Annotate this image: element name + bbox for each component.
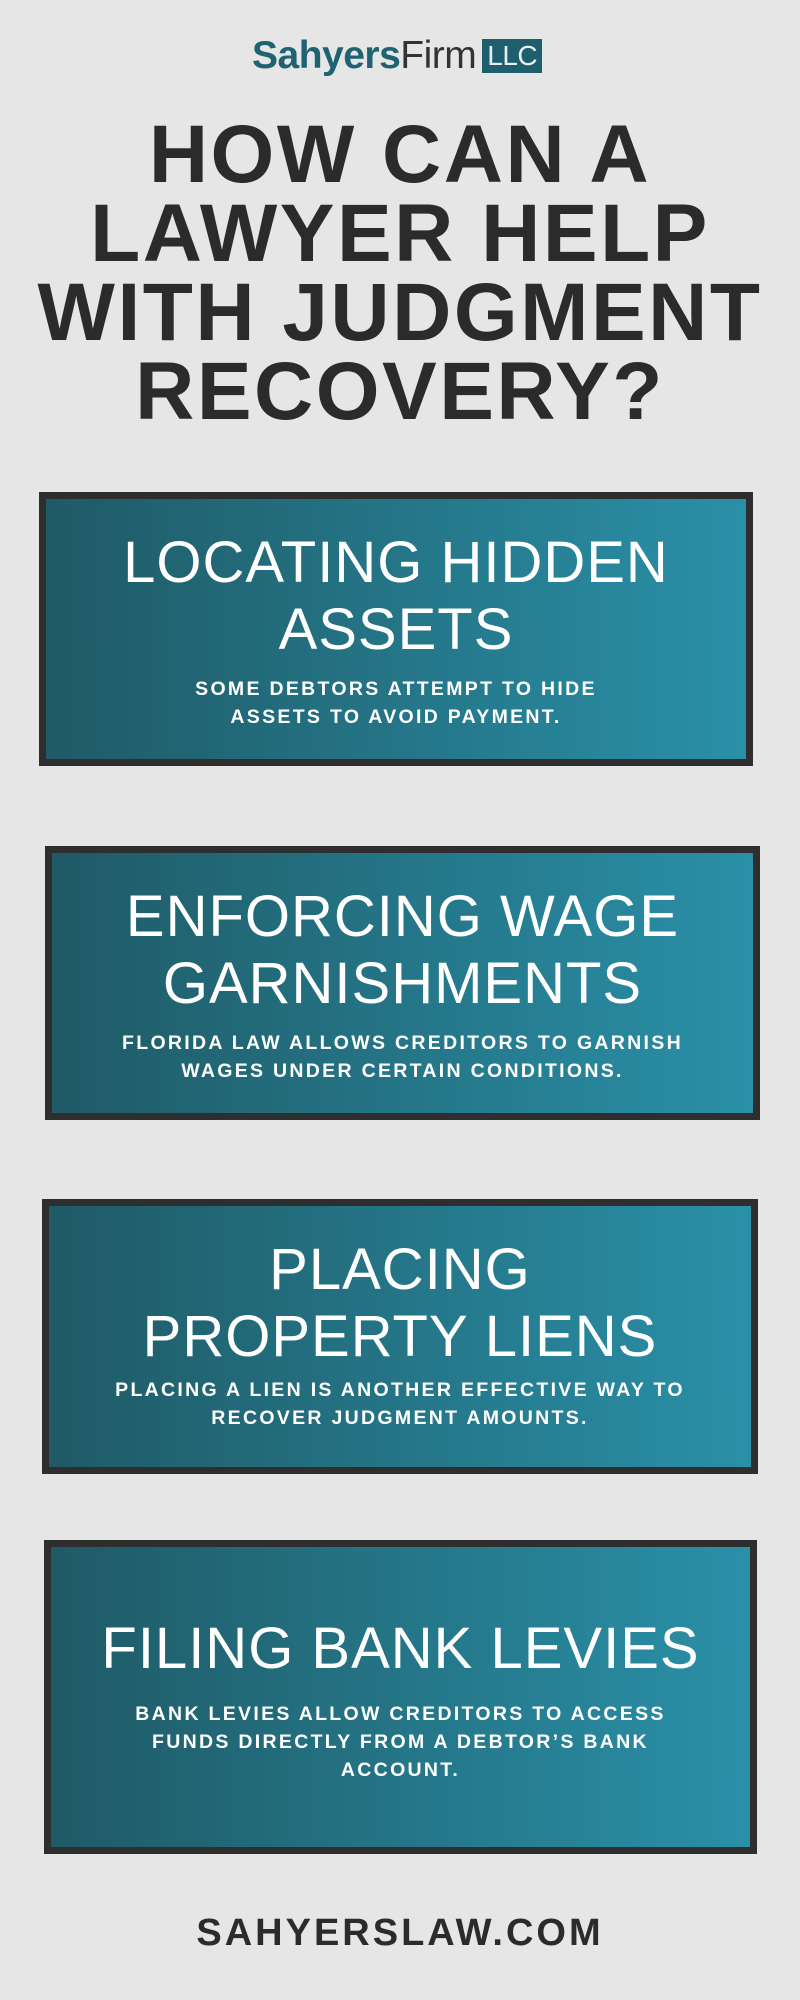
text block: PLACING A LIEN IS ANOTHER EFFECTIVE WAY TO (115, 1379, 685, 1401)
heading: FILING BANK LEVIES (101, 1616, 700, 1681)
heading: LOCATING HIDDEN (123, 530, 669, 595)
text block: FUNDS DIRECTLY FROM A DEBTOR’S BANK (152, 1731, 649, 1753)
logo (252, 34, 542, 77)
text block (195, 678, 597, 728)
text block: BANK LEVIES ALLOW CREDITORS TO ACCESS (135, 1703, 666, 1725)
panel: bank levies (44, 1540, 757, 1854)
title: RECOVERY? (135, 346, 665, 437)
text block (115, 1379, 685, 1429)
title: LAWYER HELP (90, 188, 710, 279)
title: HOW CAN A (149, 109, 651, 200)
heading: ENFORCING WAGE (126, 884, 679, 949)
title: WITH JUDGMENT (38, 267, 762, 358)
panel: property liens (42, 1199, 758, 1474)
title (38, 109, 762, 437)
logo: Firm (400, 34, 476, 77)
footer: SAHYERSLAW.COM (196, 1912, 604, 1954)
text block (122, 1032, 683, 1082)
heading (123, 530, 669, 662)
heading: GARNISHMENTS (163, 951, 642, 1016)
text block (135, 1703, 666, 1781)
text block: ACCOUNT. (341, 1759, 460, 1781)
logo: LLC (487, 40, 537, 71)
heading: PROPERTY LIENS (143, 1304, 657, 1369)
text block: FLORIDA LAW ALLOWS CREDITORS TO GARNISH (122, 1032, 683, 1054)
text block: RECOVER JUDGMENT AMOUNTS. (211, 1407, 589, 1429)
heading (126, 884, 679, 1016)
text block: WAGES UNDER CERTAIN CONDITIONS. (181, 1060, 624, 1082)
text block: ASSETS TO AVOID PAYMENT. (230, 706, 562, 728)
text block: SOME DEBTORS ATTEMPT TO HIDE (195, 678, 597, 700)
panel: wage garnishments (45, 846, 760, 1120)
logo: Sahyers (252, 34, 400, 77)
heading: ASSETS (279, 597, 513, 662)
heading (143, 1237, 657, 1369)
heading: PLACING (269, 1237, 531, 1302)
panel: locating hidden assets (39, 492, 753, 766)
